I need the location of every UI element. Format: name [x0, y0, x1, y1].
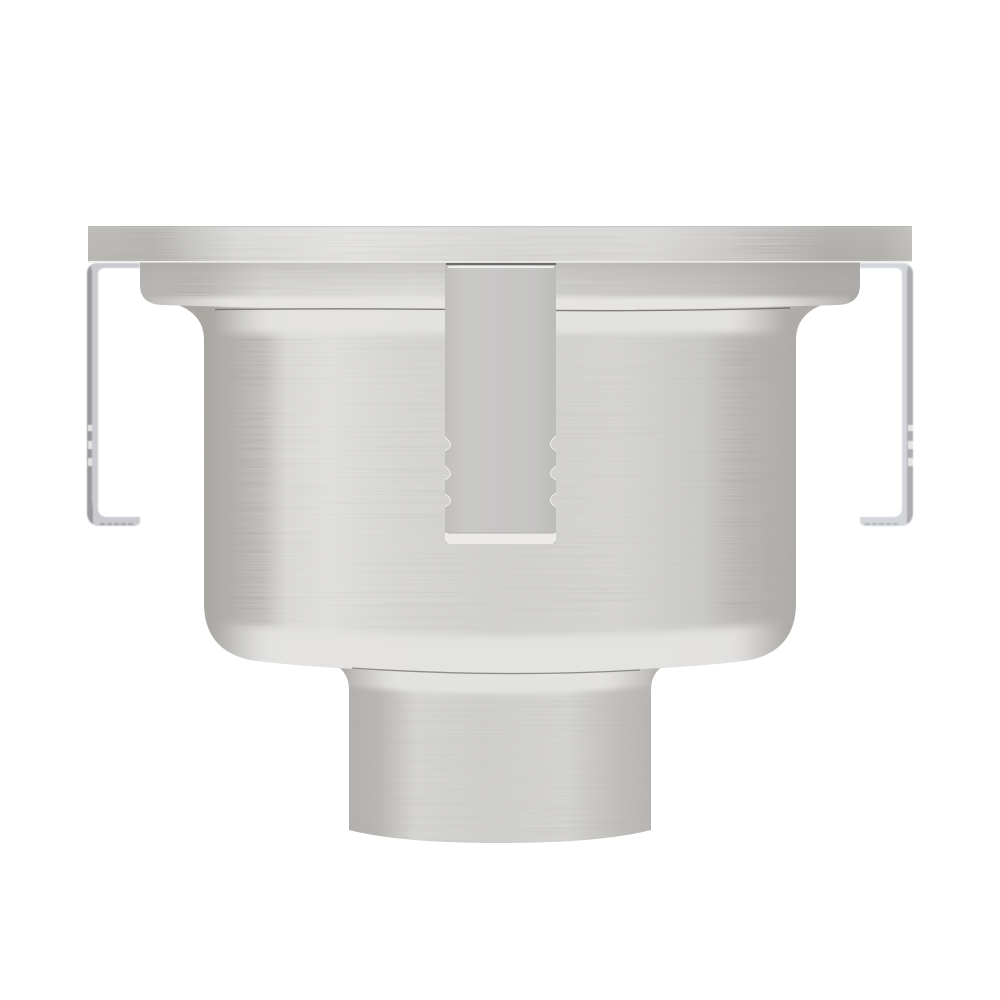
illustration: stainless steel floor drain, side view [86, 226, 914, 843]
left hanger bracket [87, 263, 140, 526]
shadow line under collar [215, 308, 790, 311]
light band at body base [224, 623, 777, 672]
brushed metal texture [204, 335, 796, 635]
collar under the plate [140, 262, 860, 313]
outlet pipe [340, 668, 660, 843]
right hanger bracket [860, 263, 913, 526]
main cylindrical body [178, 305, 822, 690]
spring clip [445, 263, 556, 544]
top flange plate [88, 226, 912, 263]
light band below collar [215, 306, 785, 333]
base shadow line [352, 668, 640, 674]
